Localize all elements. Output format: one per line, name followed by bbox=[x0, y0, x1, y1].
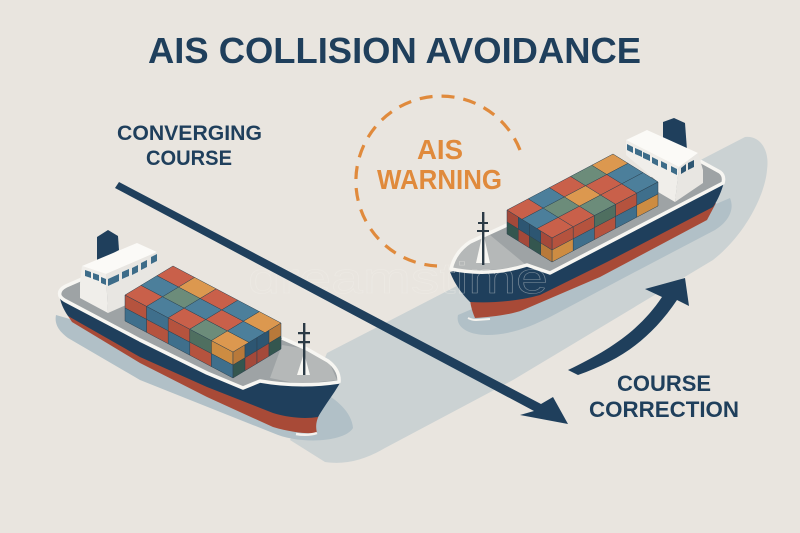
label: course correction bbox=[589, 371, 739, 422]
label: converging course: CONVERGING bbox=[117, 122, 262, 145]
title: AIS COLLISION AVOIDANCE bbox=[148, 30, 641, 71]
AIS warning dashed circle bbox=[356, 96, 520, 266]
left ship bbox=[56, 230, 353, 440]
water wake band bbox=[290, 137, 768, 463]
right ship deck and rail bbox=[451, 161, 724, 273]
label: course correction: COURSE bbox=[617, 371, 711, 396]
left ship shadow bbox=[56, 315, 353, 440]
left ship containers bbox=[125, 266, 281, 378]
right ship bridge bbox=[626, 130, 703, 202]
label: course correction: CORRECTION bbox=[589, 397, 739, 422]
arrow: converging course bbox=[115, 182, 568, 424]
label: AIS warning: AIS bbox=[417, 134, 463, 165]
left ship bridge bbox=[80, 243, 157, 313]
label: AIS warning: WARNING bbox=[377, 164, 502, 195]
label: converging course bbox=[117, 122, 262, 170]
right ship hull bbox=[450, 182, 724, 320]
right ship mast bbox=[476, 212, 490, 265]
left ship hull bbox=[59, 292, 340, 435]
watermark: dreamstime bbox=[248, 254, 548, 303]
left ship deck and rail bbox=[60, 279, 339, 388]
left ship funnel bbox=[97, 230, 119, 262]
arrow: course correction bbox=[568, 278, 689, 375]
right ship shadow bbox=[458, 198, 732, 335]
right ship bbox=[450, 118, 732, 335]
right ship containers bbox=[507, 154, 658, 262]
label: AIS warning bbox=[377, 134, 502, 195]
right ship funnel bbox=[663, 118, 687, 150]
label: converging course: COURSE bbox=[146, 147, 232, 170]
left ship mast bbox=[297, 323, 310, 375]
